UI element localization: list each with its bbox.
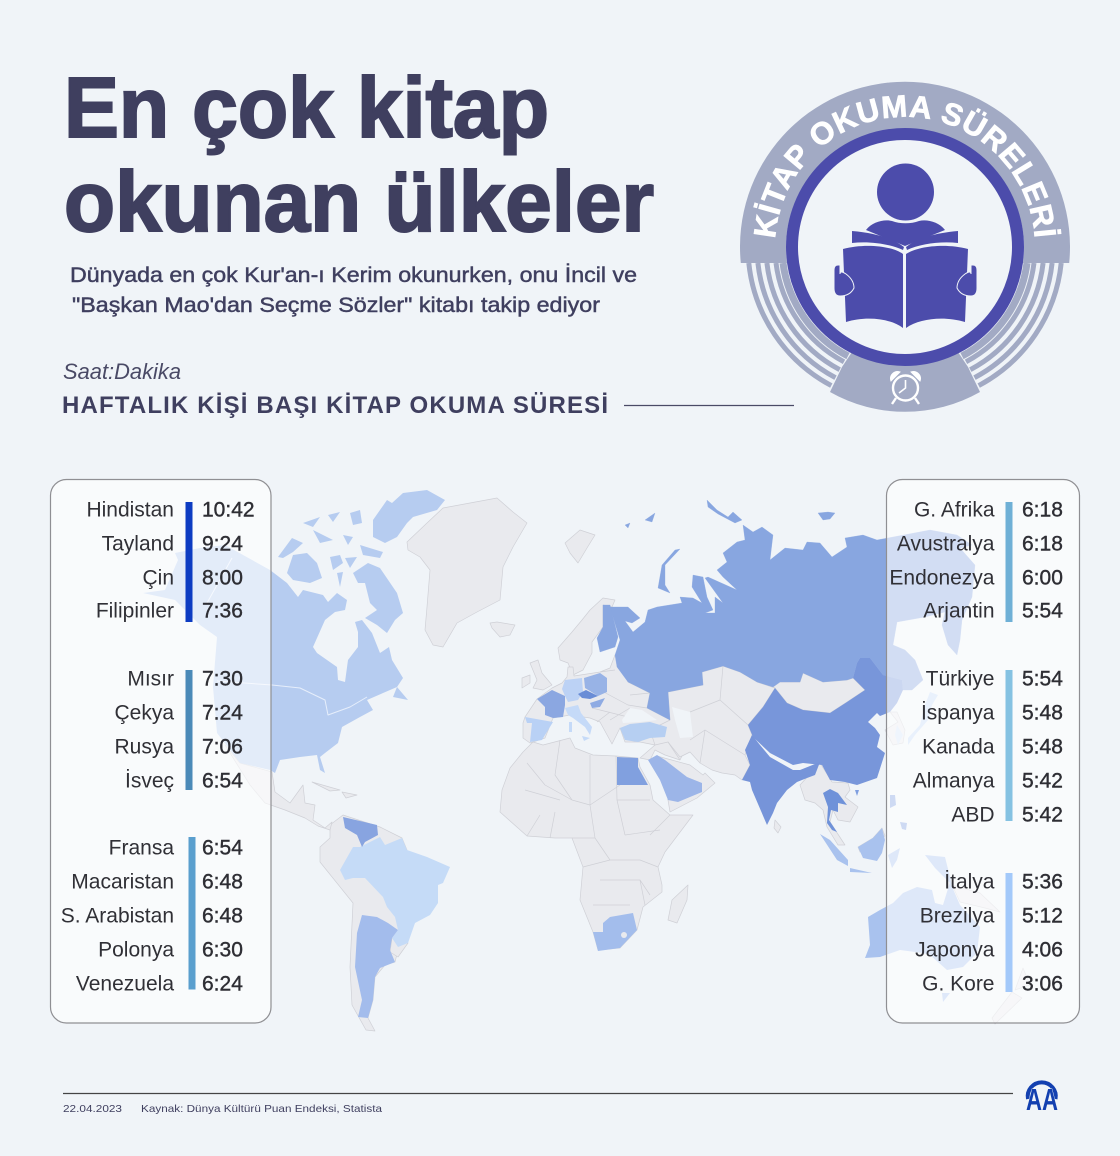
group 2: Çekya [114, 702, 174, 724]
group 1: Çin [142, 566, 174, 590]
group 2: İsveç [125, 770, 174, 792]
panel box [886, 480, 1080, 1023]
group 2: 7:24 [202, 702, 243, 724]
group 3: Macaristan [71, 870, 174, 894]
group 4: Avustralya [897, 532, 995, 556]
panel: right ranking [886, 480, 1080, 1023]
badge curved text: KİTAP OKUMA SÜRELERİ [753, 94, 1062, 238]
group 5: 5:48 [1022, 702, 1063, 724]
blue: Australia [865, 882, 980, 1002]
group 5: 5:42 [1022, 770, 1063, 792]
badge stripes [749, 263, 1061, 386]
panel: left ranking [50, 480, 271, 1023]
group 3: Fransa [109, 836, 174, 860]
footer: Kaynak: Dünya Kültürü Puan Endeksi, Statista [141, 1103, 382, 1115]
group 6: İtalya [944, 870, 995, 894]
blue: China [748, 658, 903, 785]
blue: Thailand [823, 789, 847, 832]
group 6: 5:12 [1022, 904, 1063, 928]
group 2 [114, 668, 243, 792]
group 3: 6:48 [202, 870, 243, 894]
footer [63, 1094, 1013, 1115]
subtitle [70, 264, 637, 317]
group 1: 8:00 [202, 566, 243, 590]
blue: Poland [584, 673, 607, 696]
group 5 [913, 668, 1063, 826]
blue: Brazil [340, 837, 450, 947]
blue: Germany [562, 678, 583, 702]
group 5: 5:42 [1022, 804, 1063, 826]
group 6: Japonya [915, 938, 995, 962]
world map [143, 490, 1030, 1031]
group 3: 6:30 [202, 938, 243, 962]
group 5: Türkiye [926, 668, 994, 690]
subtitle: "Başkan Mao'dan Seçme Sözler" kitabı takip ediyor [72, 294, 600, 317]
gray borders [525, 666, 748, 905]
group 5: ABD [951, 804, 994, 826]
group 3: S. Arabistan [61, 904, 174, 928]
blue: Spain [525, 717, 553, 742]
group 3: Venezuela [76, 972, 174, 996]
group 1: Tayland [102, 532, 174, 556]
group 3: Polonya [98, 938, 174, 962]
group 5: 5:54 [1022, 668, 1063, 690]
group 3: 6:24 [202, 972, 243, 996]
title [64, 61, 654, 250]
title: En çok kitap [64, 61, 549, 156]
group 2: 7:30 [202, 668, 243, 690]
group 6: 4:06 [1022, 938, 1063, 962]
group 1: Hindistan [86, 498, 174, 522]
group 6: 5:36 [1022, 870, 1063, 894]
blue: Egypt [617, 757, 648, 785]
group 2: 6:54 [202, 770, 243, 792]
group 2: 7:06 [202, 736, 243, 758]
group 3 [61, 836, 243, 996]
blue: Czechia [578, 690, 598, 699]
badge ring [792, 134, 1018, 360]
blue: Italy [565, 705, 592, 741]
group 4 [889, 498, 1063, 622]
icon: reader [834, 164, 977, 328]
blue: Japan [908, 692, 938, 745]
group 2: Mısır [127, 668, 174, 690]
icon: alarm clock [891, 372, 920, 404]
group 4: 6:18 [1022, 532, 1063, 556]
group 6 [915, 870, 1063, 996]
badge: kitap okuma süreleri [740, 82, 1070, 412]
group 5: İspanya [921, 702, 995, 724]
group 4: G. Afrika [914, 498, 995, 522]
blue: France [537, 690, 565, 718]
subtitle: Dünyada en çok Kur'an-ı Kerim okunurken, onu İncil ve [70, 264, 637, 287]
group 4: 6:00 [1022, 566, 1063, 590]
blue: Taiwan, Philippines [855, 790, 907, 830]
group 1: 7:36 [202, 600, 243, 622]
seas [622, 707, 693, 800]
group 2: Rusya [114, 736, 174, 758]
blue: South Africa [593, 913, 637, 951]
group 4: 6:18 [1022, 498, 1063, 522]
blue: Russia, Finland [597, 500, 975, 720]
gray countries [225, 498, 1030, 1031]
badge band [740, 82, 1070, 263]
blue: Hungary [590, 698, 605, 708]
group 5: Kanada [922, 736, 995, 758]
group 4: 5:54 [1022, 600, 1063, 622]
blue: Indonesia [820, 828, 952, 885]
group 5: 5:48 [1022, 736, 1063, 758]
USA Canada border [207, 558, 367, 715]
unit note: Saat:Dakika [63, 359, 181, 384]
group 6: 3:06 [1022, 972, 1063, 996]
group 6: Brezilya [920, 904, 995, 928]
blue: Venezuela [343, 817, 378, 847]
blue: Argentina [355, 915, 398, 1018]
blue: South Korea [895, 725, 903, 745]
group 4: Arjantin [923, 600, 994, 622]
group 6: G. Kore [922, 972, 994, 996]
footer: 22.04.2023 [63, 1103, 122, 1115]
panel box [50, 480, 271, 1023]
group 3: 6:48 [202, 904, 243, 928]
chart heading: HAFTALIK KİŞİ BAŞI KİTAP OKUMA SÜRESİ [62, 392, 608, 419]
group 1 [86, 498, 255, 622]
blue: Saudi Arabia [648, 755, 702, 802]
group 5: Almanya [913, 770, 995, 792]
blue: India [742, 735, 820, 825]
title: okunan ülkeler [64, 155, 654, 250]
blue: Turkey [620, 722, 667, 742]
group 1: Filipinler [96, 600, 174, 622]
group 1: 10:42 [202, 498, 255, 522]
group 4: Endonezya [889, 566, 995, 590]
badge bottom band [830, 340, 980, 412]
group 3: 6:54 [202, 836, 243, 860]
group 1: 9:24 [202, 532, 243, 556]
blue: USA, Canada [143, 490, 445, 773]
AA logo: AA [1026, 1082, 1058, 1117]
